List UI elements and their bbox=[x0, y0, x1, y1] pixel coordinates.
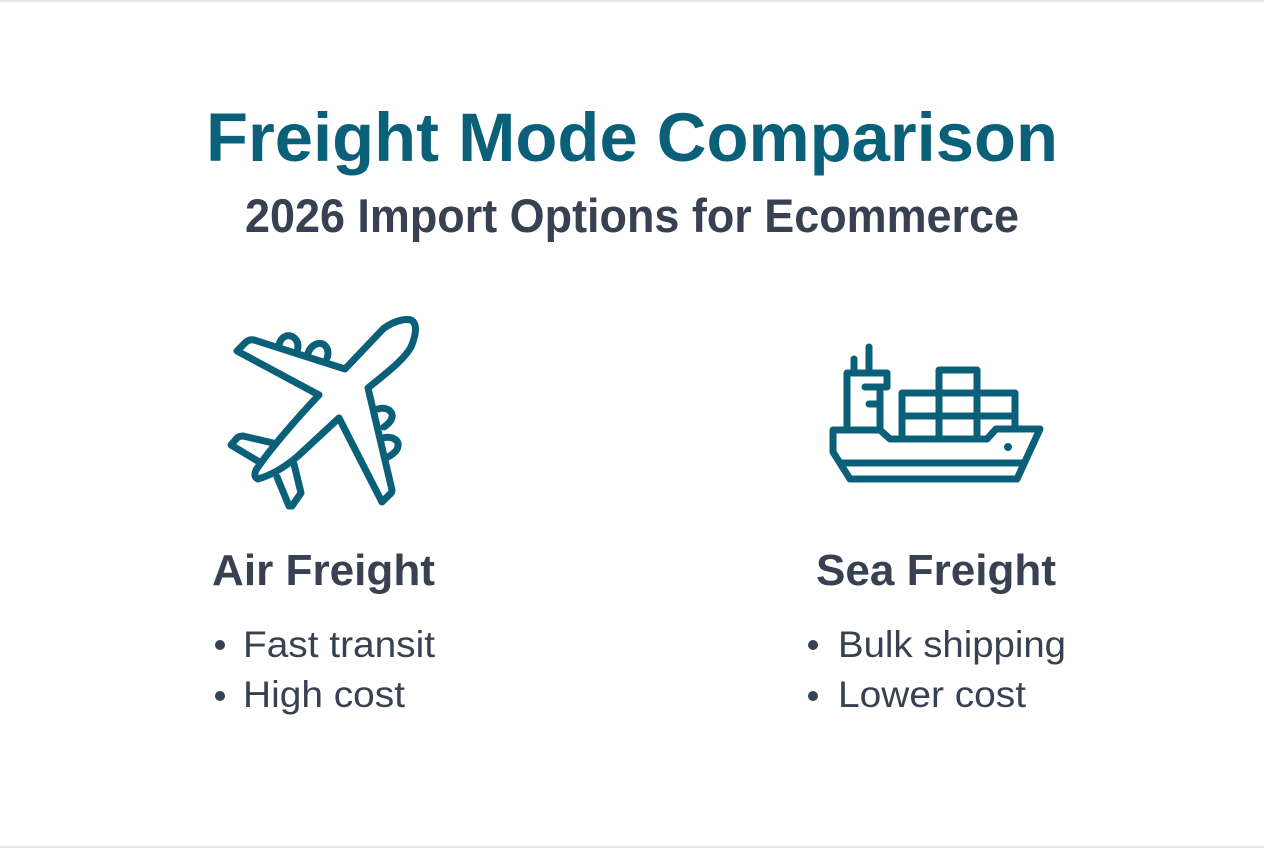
heading: sea freight: Sea Freight bbox=[816, 546, 1056, 595]
icon: cargo ship bbox=[833, 347, 1040, 479]
heading: air freight: Air Freight bbox=[212, 546, 435, 595]
subtitle: 2026 Import Options for Ecommerce bbox=[245, 189, 1019, 242]
list: sea freight points bbox=[808, 624, 1066, 715]
list: air freight points: Fast transit bbox=[243, 624, 436, 665]
list: air freight points bbox=[215, 624, 436, 715]
title: Freight Mode Comparison bbox=[206, 99, 1058, 176]
list: air freight points: High cost bbox=[243, 674, 406, 715]
panel: air freight bbox=[212, 319, 436, 715]
panel: sea freight bbox=[808, 347, 1066, 715]
list: sea freight points: Lower cost bbox=[838, 674, 1027, 715]
icon: airplane bbox=[231, 319, 416, 506]
list: sea freight points: Bulk shipping bbox=[838, 624, 1066, 665]
